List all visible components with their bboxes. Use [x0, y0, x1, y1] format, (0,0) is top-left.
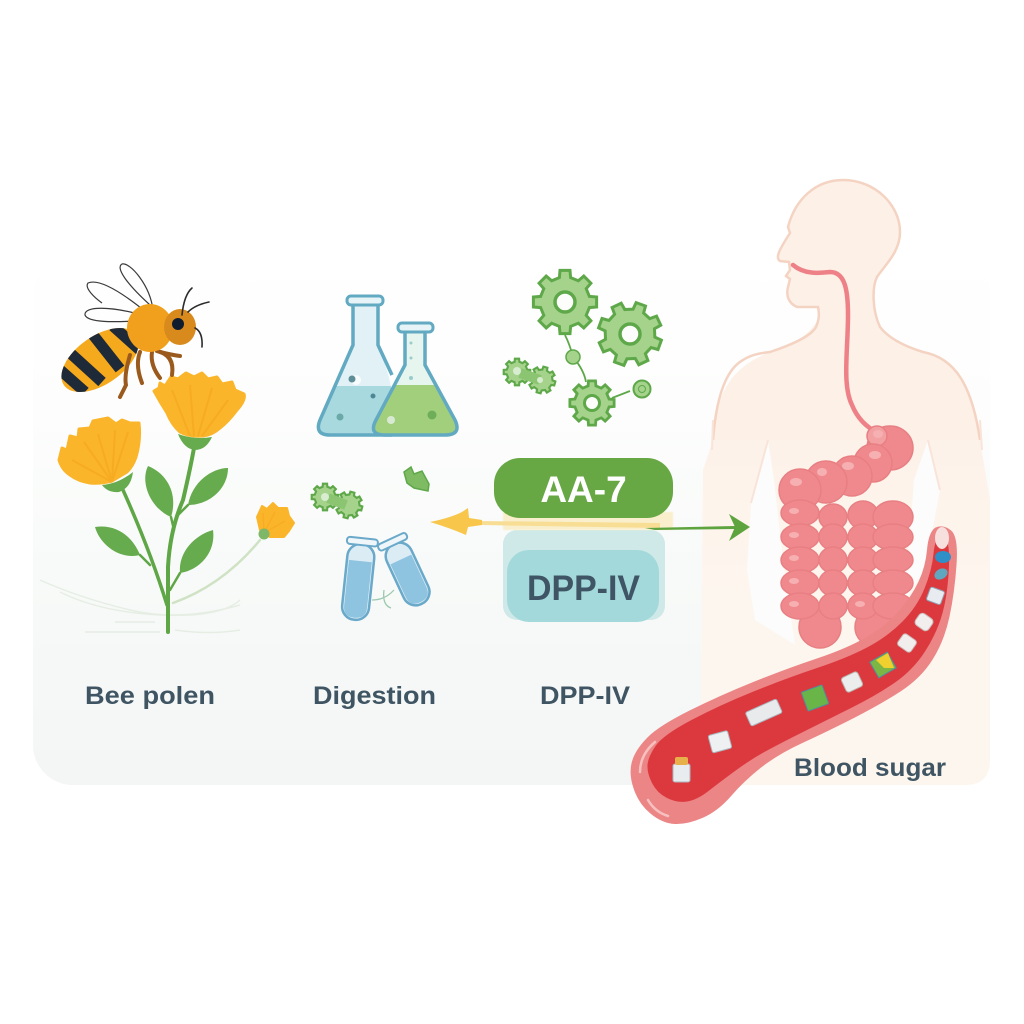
- double gear: [504, 359, 558, 396]
- flower: small: [257, 503, 294, 540]
- head: [164, 309, 196, 345]
- ground strokes: [40, 580, 240, 632]
- legs: [120, 351, 180, 397]
- flower: large left: [59, 418, 140, 492]
- box: DPP-IV: [507, 550, 659, 622]
- thorax: [127, 304, 173, 352]
- background panel: [33, 250, 990, 785]
- sugar particles: [673, 527, 951, 782]
- icon: bee: [50, 264, 209, 400]
- gear three: [570, 381, 614, 425]
- label: digestion: Digestion: [313, 682, 436, 710]
- label: blood sugar: Blood sugar: [794, 754, 946, 782]
- leaves: [95, 466, 228, 573]
- band under AA-7: [503, 512, 673, 530]
- label: DPP-IV: DPP-IV: [540, 682, 630, 710]
- box: DPP-IV: DPP-IV: [527, 569, 641, 608]
- pill: AA-7: [494, 458, 673, 518]
- green arrow: [645, 514, 750, 541]
- icon: flasks: [315, 296, 465, 436]
- icon: test tubes: [339, 532, 436, 621]
- flower: large right: [154, 373, 244, 450]
- abdomen: [61, 328, 138, 392]
- pill: AA-7: AA-7: [540, 469, 627, 510]
- human body silhouette: [700, 180, 990, 785]
- blood vessel: [632, 527, 955, 823]
- esophagus: [793, 265, 878, 433]
- DPP-IV back plate: [503, 530, 665, 620]
- gear one: [533, 270, 597, 334]
- icon: large gears: [504, 270, 671, 425]
- intestines: [779, 426, 913, 648]
- yellow arrow: [430, 508, 660, 535]
- gear two: [589, 293, 671, 375]
- plant stems: [123, 448, 260, 632]
- wings: [85, 264, 153, 322]
- label: bee polen: Bee polen: [85, 682, 215, 710]
- antennae: [182, 288, 209, 347]
- icon: small gear fragments: [312, 467, 429, 521]
